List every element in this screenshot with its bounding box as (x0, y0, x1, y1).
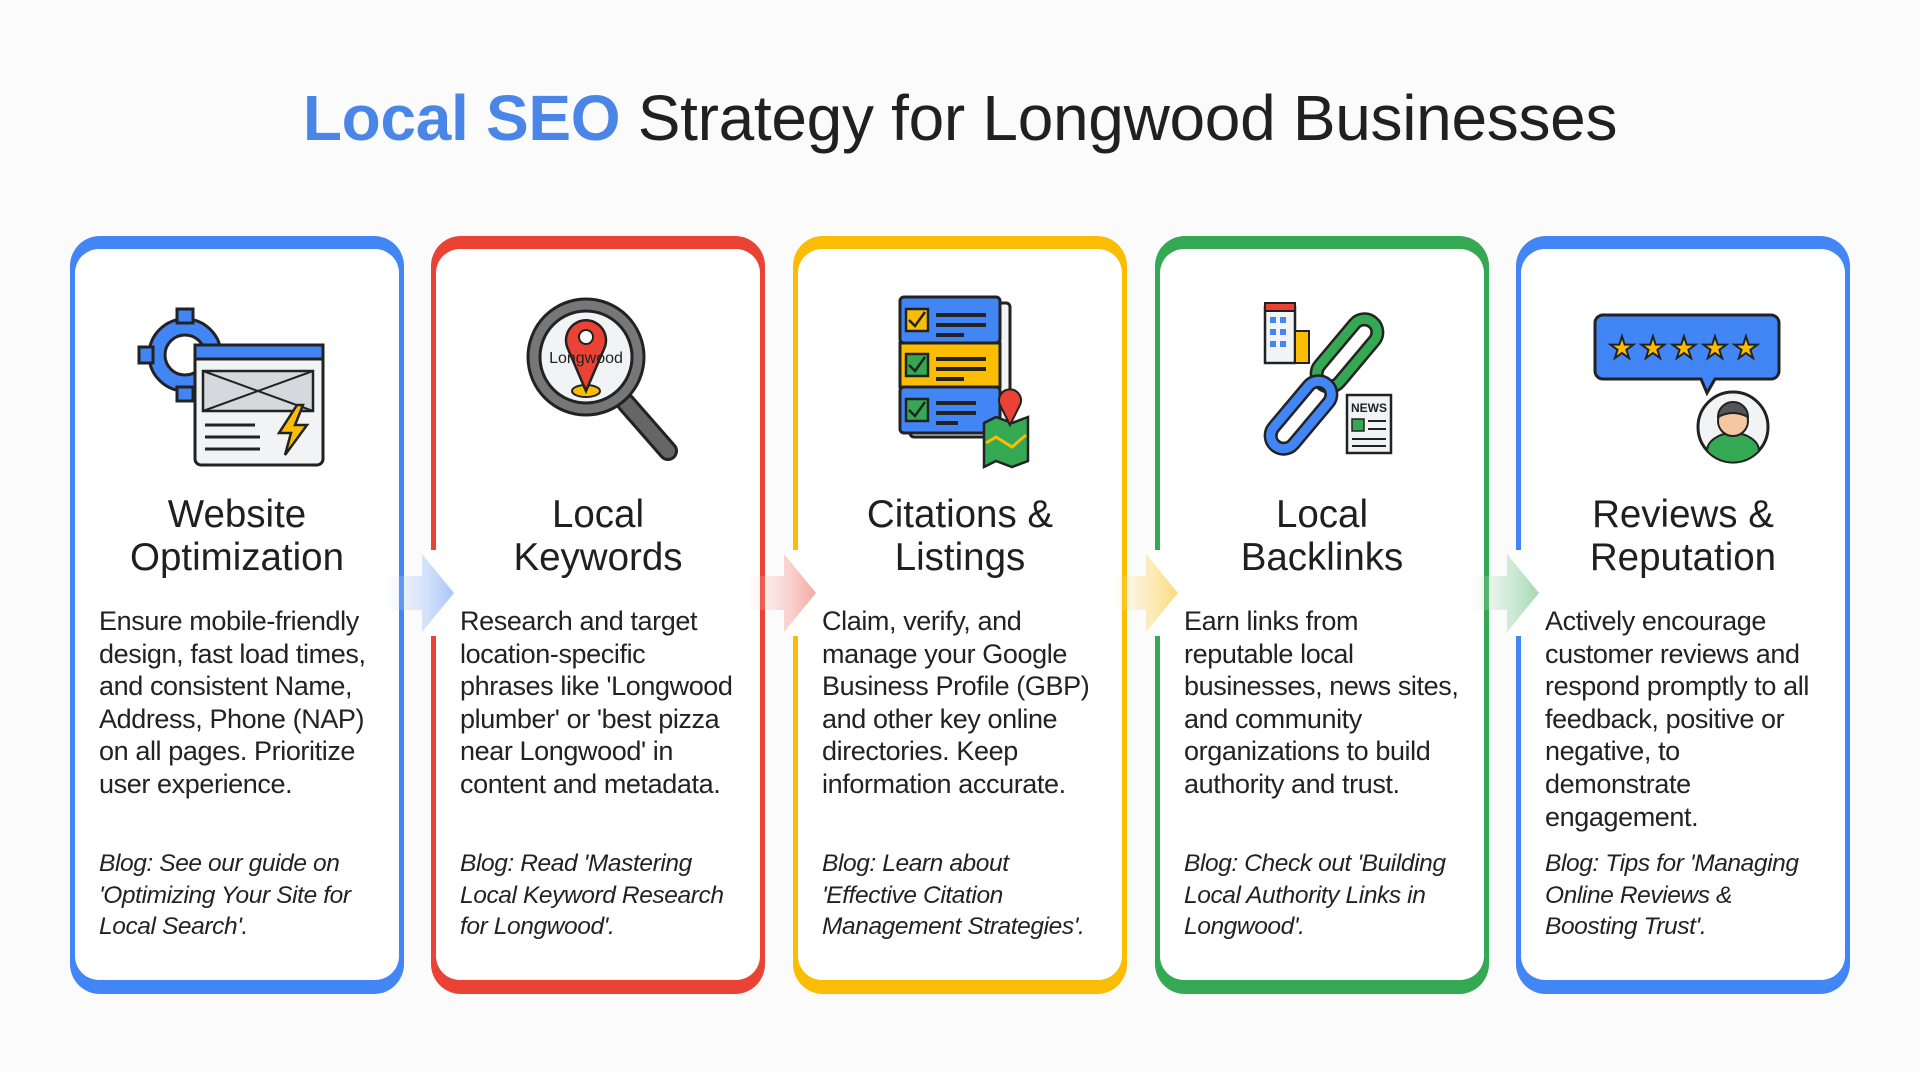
heading (1590, 493, 1776, 579)
body text: near Longwood' in (460, 736, 673, 766)
body text: location-specific (460, 639, 645, 669)
body text: engagement. (1545, 802, 1698, 832)
body text: Actively encourage (1545, 606, 1766, 636)
body text: Earn links from (1184, 606, 1358, 636)
title: Local SEO Strategy for Longwood Businesses (303, 82, 1617, 154)
blog link: Blog: Learn about (822, 850, 1009, 877)
heading: Local (1276, 493, 1368, 536)
arrow 4 (1479, 550, 1539, 636)
icon: star review bubble and avatar: ★ (1702, 331, 1728, 366)
icon: checklist and map (898, 296, 1030, 469)
icon: chain links, building, news: NEWS (1351, 401, 1387, 415)
arrow 3 (1116, 550, 1178, 636)
blog link: Blog: Check out 'Building (1184, 850, 1446, 877)
body text: negative, to (1545, 736, 1680, 766)
body text: and community (1184, 704, 1362, 734)
icon: star review bubble and avatar: ★ (1609, 331, 1635, 366)
body text: manage your Google (822, 639, 1067, 669)
blog link (822, 850, 1084, 940)
heading: Keywords (513, 536, 683, 579)
body text: feedback, positive or (1545, 704, 1784, 734)
heading (867, 493, 1053, 579)
body text: content and metadata. (460, 769, 720, 799)
body text: Business Profile (GBP) (822, 671, 1089, 701)
body text: customer reviews and (1545, 639, 1800, 669)
body text: authority and trust. (1184, 769, 1400, 799)
body text (460, 606, 733, 799)
heading: Website (168, 493, 306, 536)
body text (1545, 606, 1809, 832)
body text: organizations to build (1184, 736, 1430, 766)
icon: star review bubble and avatar: ★ (1733, 331, 1759, 366)
blog link: Management Strategies'. (822, 913, 1084, 940)
icon: gear and browser (138, 308, 324, 466)
heading (130, 493, 344, 579)
body text: plumber' or 'best pizza (460, 704, 719, 734)
blog link: Blog: Tips for 'Managing (1545, 850, 1799, 877)
body text: on all pages. Prioritize (99, 736, 355, 766)
body text: respond promptly to all (1545, 671, 1809, 701)
blog link: Local Search'. (99, 913, 248, 940)
body text: Research and target (460, 606, 697, 636)
panel: website optimization (70, 236, 404, 994)
heading: Reviews & (1592, 493, 1774, 536)
icon: star review bubble and avatar: ★ (1671, 331, 1697, 366)
blog link: Blog: See our guide on (99, 850, 339, 877)
blog link: Local Keyword Research (460, 882, 724, 908)
blog link (1545, 850, 1799, 940)
heading: Reputation (1590, 536, 1776, 579)
blog link: for Longwood'. (460, 913, 614, 940)
body text: and consistent Name, (99, 671, 352, 701)
heading: Listings (895, 536, 1025, 579)
blog link: Local Authority Links in (1184, 882, 1425, 908)
icon: star review bubble and avatar: ★ (1640, 331, 1666, 366)
body text: businesses, news sites, (1184, 671, 1458, 701)
body text (822, 606, 1089, 799)
panel: reviews & reputation (1516, 236, 1850, 994)
heading: Citations & (867, 493, 1053, 536)
arrow 1 (395, 550, 454, 636)
heading: Local (552, 493, 644, 536)
body text: Address, Phone (NAP) (99, 704, 364, 734)
body text: Ensure mobile-friendly (99, 606, 359, 636)
body text: phrases like 'Longwood (460, 671, 733, 701)
body text: information accurate. (822, 769, 1066, 799)
body text: demonstrate (1545, 769, 1691, 799)
body text (99, 606, 366, 799)
icon: magnifier with pin: Longwood (549, 350, 623, 367)
body text: directories. Keep (822, 736, 1018, 766)
arrow 2 (756, 550, 816, 636)
body text: reputable local (1184, 639, 1354, 669)
heading: Backlinks (1241, 536, 1403, 579)
icon: star review bubble and avatar (1594, 314, 1780, 464)
blog link (460, 850, 724, 940)
body text: design, fast load times, (99, 639, 366, 669)
blog link (1184, 850, 1446, 940)
blog link: Blog: Read 'Mastering (460, 850, 692, 877)
panel: local backlinks (1155, 236, 1489, 994)
body text: Claim, verify, and (822, 606, 1021, 636)
blog link: 'Effective Citation (822, 882, 1003, 908)
blog link (99, 850, 352, 940)
blog link: Online Reviews & (1545, 882, 1732, 908)
heading (513, 493, 683, 579)
icon: magnifier with pin (526, 298, 678, 461)
panel: citations & listings (793, 236, 1127, 994)
heading: Optimization (130, 536, 344, 579)
body text (1184, 606, 1458, 799)
panel: local keywords (431, 236, 765, 994)
blog link: Boosting Trust'. (1545, 913, 1706, 940)
blog link: Longwood'. (1184, 913, 1305, 940)
body text: and other key online (822, 704, 1057, 734)
body text: user experience. (99, 769, 292, 799)
blog link: 'Optimizing Your Site for (99, 882, 351, 908)
heading (1241, 493, 1403, 579)
icon: chain links, building, news (1264, 302, 1392, 456)
